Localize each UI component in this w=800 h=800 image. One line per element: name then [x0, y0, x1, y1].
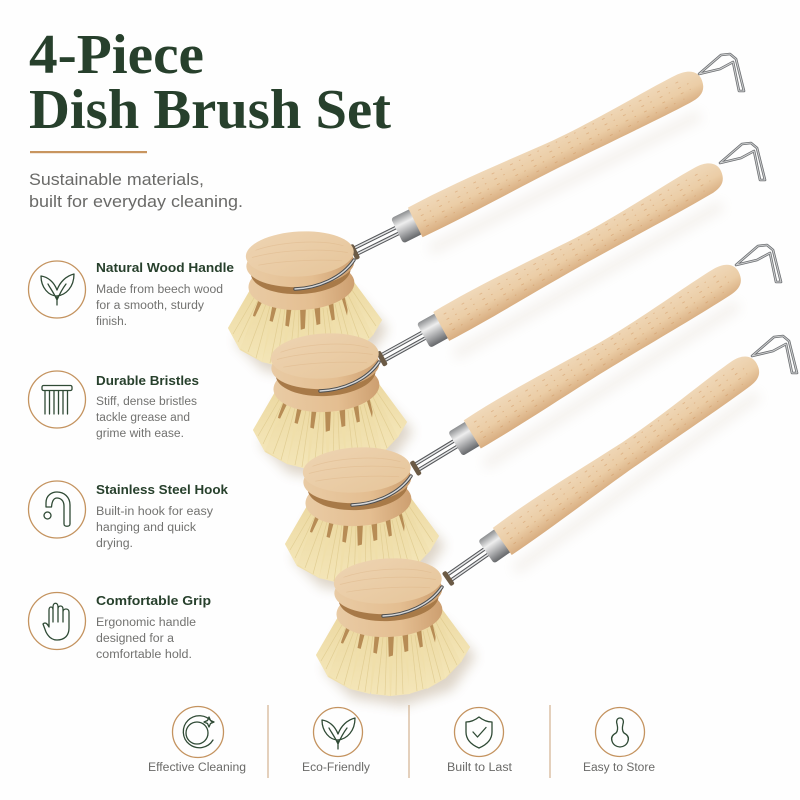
feature text: durable bristles: grime with ease.: [96, 428, 184, 440]
divider: [550, 705, 551, 778]
title: Dish Brush Set: [29, 79, 391, 141]
icon: bristles: [28, 371, 86, 428]
feature text: stainless steel hook: Built-in hook for easy: [96, 506, 213, 518]
subtitle: [29, 171, 243, 211]
icon: sparkling plate: [183, 716, 214, 748]
subtitle: built for everyday cleaning.: [29, 193, 243, 211]
title: 4-Piece: [29, 24, 204, 86]
feature text: natural wood handle: Made from beech wood: [96, 284, 223, 296]
badge: effective cleaning: [148, 706, 246, 774]
brush 1: [228, 54, 744, 379]
icon: hand: [28, 592, 86, 650]
feature text: natural wood handle: for a smooth, sturdy: [96, 300, 204, 312]
icon: shield: [466, 717, 492, 748]
feature: natural wood handle: [28, 260, 234, 328]
feature text: comfortable grip: comfortable hold.: [96, 649, 192, 661]
feature text: stainless steel hook: Stainless Steel Hook: [96, 482, 229, 497]
badge: easy to store: [583, 708, 655, 774]
badge: eco-friendly: Eco-Friendly: [302, 762, 370, 774]
brush 3: [285, 245, 781, 595]
feature text: durable bristles: Durable Bristles: [96, 373, 199, 388]
divider: [268, 705, 269, 778]
feature text: durable bristles: [96, 373, 199, 440]
feature text: comfortable grip: Comfortable Grip: [96, 593, 211, 608]
feature text: stainless steel hook: drying.: [96, 538, 133, 550]
feature text: comfortable grip: designed for a: [96, 633, 175, 645]
badge: easy to store: Easy to Store: [583, 762, 655, 774]
feature text: stainless steel hook: hanging and quick: [96, 522, 196, 534]
feature: comfortable grip: [28, 592, 211, 661]
feature text: natural wood handle: Natural Wood Handle: [96, 260, 234, 275]
brush 2: [253, 143, 765, 481]
feature text: durable bristles: Stiff, dense bristles: [96, 396, 197, 408]
badge: eco-friendly: [302, 708, 370, 774]
brush 4: [316, 336, 797, 706]
feature: durable bristles: [28, 371, 199, 440]
feature: stainless steel hook: [28, 481, 229, 550]
icon: brush silhouette: [612, 718, 628, 747]
icon: hook: [28, 481, 86, 538]
title: [29, 24, 391, 141]
feature text: durable bristles: tackle grease and: [96, 412, 190, 424]
feature text: natural wood handle: [96, 260, 234, 328]
badge: effective cleaning: Effective Cleaning: [148, 762, 246, 774]
feature text: natural wood handle: finish.: [96, 316, 127, 328]
feature text: comfortable grip: Ergonomic handle: [96, 617, 196, 629]
badge: built to last: [447, 708, 513, 774]
badge: built to last: Built to Last: [447, 762, 513, 774]
divider: [408, 705, 410, 778]
feature text: comfortable grip: [96, 593, 211, 661]
subtitle: Sustainable materials,: [29, 171, 204, 189]
feature text: stainless steel hook: [96, 482, 229, 550]
icon: leaves: [322, 718, 355, 749]
title rule: [30, 151, 147, 153]
icon: leaves: [28, 261, 86, 318]
